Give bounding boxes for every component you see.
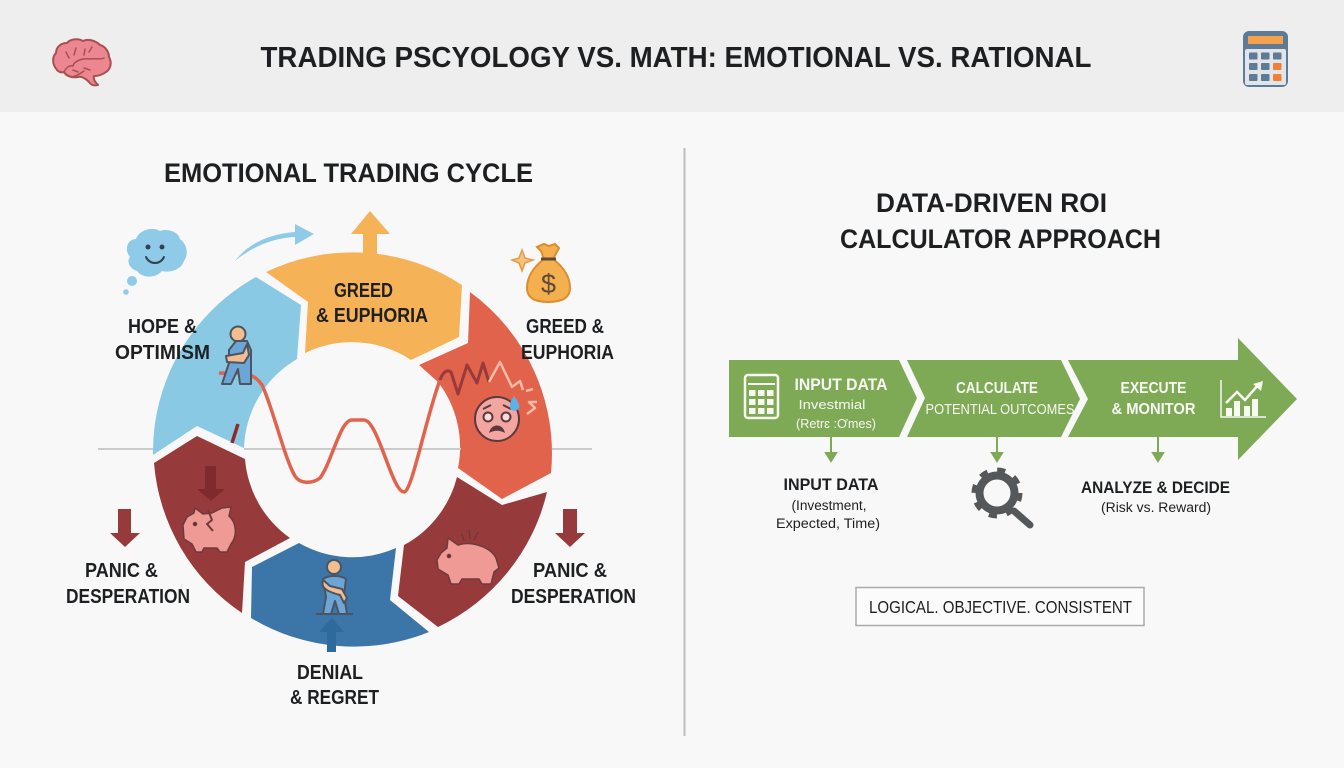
- step 1 text: Investmial: [798, 397, 866, 412]
- callout: logical objective consistent: LOGICAL. OBJECTIVE. CONSISTENT: [869, 597, 1132, 617]
- ring: blue hope segment: [153, 277, 301, 455]
- step 3 text: & MONITOR: [1112, 401, 1196, 418]
- heading: data-driven roi calculator approach: [840, 188, 1161, 254]
- step 3 text: EXECUTE: [1120, 380, 1186, 397]
- icon: broken piggy bank: [183, 507, 235, 552]
- header band: [0, 0, 1344, 112]
- icon: money bag: $: [541, 269, 556, 299]
- callout: logical objective consistent: [856, 588, 1144, 626]
- arrow: light blue curved: [235, 224, 314, 261]
- heading: data-driven roi calculator approach: DATA-DRIVEN ROI: [876, 188, 1107, 218]
- label: panic and desperation left: DESPERATION: [66, 586, 190, 608]
- dark zigzag: [440, 363, 489, 394]
- step 3 text: [1112, 380, 1196, 418]
- label: denial and regret: DENIAL: [297, 662, 363, 684]
- icon: white calculator: [745, 375, 778, 418]
- analyze and decide text: (Risk vs. Reward): [1101, 500, 1211, 515]
- heading: emotional trading cycle: EMOTIONAL TRADING CYCLE: [164, 158, 533, 188]
- label: panic and desperation right: [511, 560, 636, 608]
- baseline: [98, 448, 592, 450]
- label: panic and desperation left: PANIC &: [85, 560, 158, 582]
- ring: red fear segment: [419, 292, 552, 499]
- label: denial and regret: & REGRET: [290, 687, 379, 709]
- icon: piggy bank: [437, 529, 499, 584]
- label: denial and regret: [290, 662, 379, 709]
- input data text: INPUT DATA: [784, 476, 879, 494]
- analyze and decide text: [1081, 479, 1230, 515]
- label: hope and optimism: OPTIMISM: [115, 342, 210, 364]
- ring: blue denial segment: [251, 543, 429, 647]
- emotional price curve: [219, 373, 441, 492]
- icon: standing person: [316, 560, 353, 614]
- label: panic and desperation right: DESPERATION: [511, 586, 636, 608]
- label: greed and euphoria right: [521, 316, 614, 364]
- divider: [684, 148, 686, 736]
- panel: emotional trading cycle: [66, 158, 636, 709]
- arrow: orange up: [351, 211, 390, 265]
- label: segment greed and euphoria: [316, 280, 428, 327]
- ring: dark red panic right segment: [398, 477, 547, 627]
- step 1 text: [794, 376, 888, 431]
- arrow: green down 1: [826, 437, 836, 461]
- step 2 text: CALCULATE: [956, 380, 1038, 397]
- icon: gear with magnifier: [974, 470, 1030, 525]
- analyze and decide text: ANALYZE & DECIDE: [1081, 479, 1230, 497]
- label: hope and optimism: [115, 316, 210, 364]
- input data text: (Investment,: [792, 498, 866, 513]
- label: segment greed and euphoria: GREED: [334, 280, 393, 302]
- arrow: dark red down right: [555, 509, 585, 547]
- icon: growth chart: [1221, 380, 1266, 417]
- process arrow step 2: [907, 360, 1080, 437]
- light zigzag: [489, 362, 537, 414]
- ring: orange greed segment: [266, 252, 462, 360]
- label: segment greed and euphoria: & EUPHORIA: [316, 305, 428, 327]
- label: panic and desperation right: PANIC &: [533, 560, 607, 582]
- arrow: dark red down left: [110, 509, 140, 547]
- icon: thought cloud: [123, 229, 187, 295]
- label: hope and optimism: HOPE &: [128, 316, 197, 338]
- arrow: dark red down in ring: [197, 466, 225, 501]
- icon: money bag: [512, 244, 570, 302]
- label: panic and desperation left: [66, 560, 190, 608]
- arrow: green down 2: [992, 437, 1002, 461]
- ring: dark red panic left segment: [154, 436, 290, 613]
- input data text: [776, 476, 880, 531]
- process arrow step 3: [1068, 338, 1297, 460]
- step 1 text: (Retrɛ :Ơmes): [796, 416, 876, 431]
- arrow: blue up: [319, 618, 344, 652]
- icon: calculator: [1243, 31, 1288, 87]
- icon: brain: [53, 39, 111, 85]
- input data text: Expected, Time): [776, 516, 880, 531]
- arrow: green down 3: [1153, 437, 1163, 461]
- heading: data-driven roi calculator approach: CALCULATOR APPROACH: [840, 224, 1161, 254]
- icon: worker on blue segment: [222, 326, 251, 384]
- step 2 text: [926, 380, 1074, 418]
- process arrow step 1: [729, 360, 917, 437]
- panel: data-driven ROI calculator approach: [729, 188, 1297, 626]
- label: greed and euphoria right: GREED &: [526, 316, 604, 338]
- step 1 text: INPUT DATA: [794, 376, 888, 394]
- small dark red tick: [232, 424, 238, 443]
- title: TRADING PSCYOLOGY VS. MATH: EMOTIONAL VS. RATIONAL: [260, 42, 1092, 74]
- step 2 text: POTENTIAL OUTCOMES: [926, 402, 1074, 418]
- label: greed and euphoria right: EUPHORIA: [521, 342, 614, 364]
- icon: worried face: [475, 396, 519, 441]
